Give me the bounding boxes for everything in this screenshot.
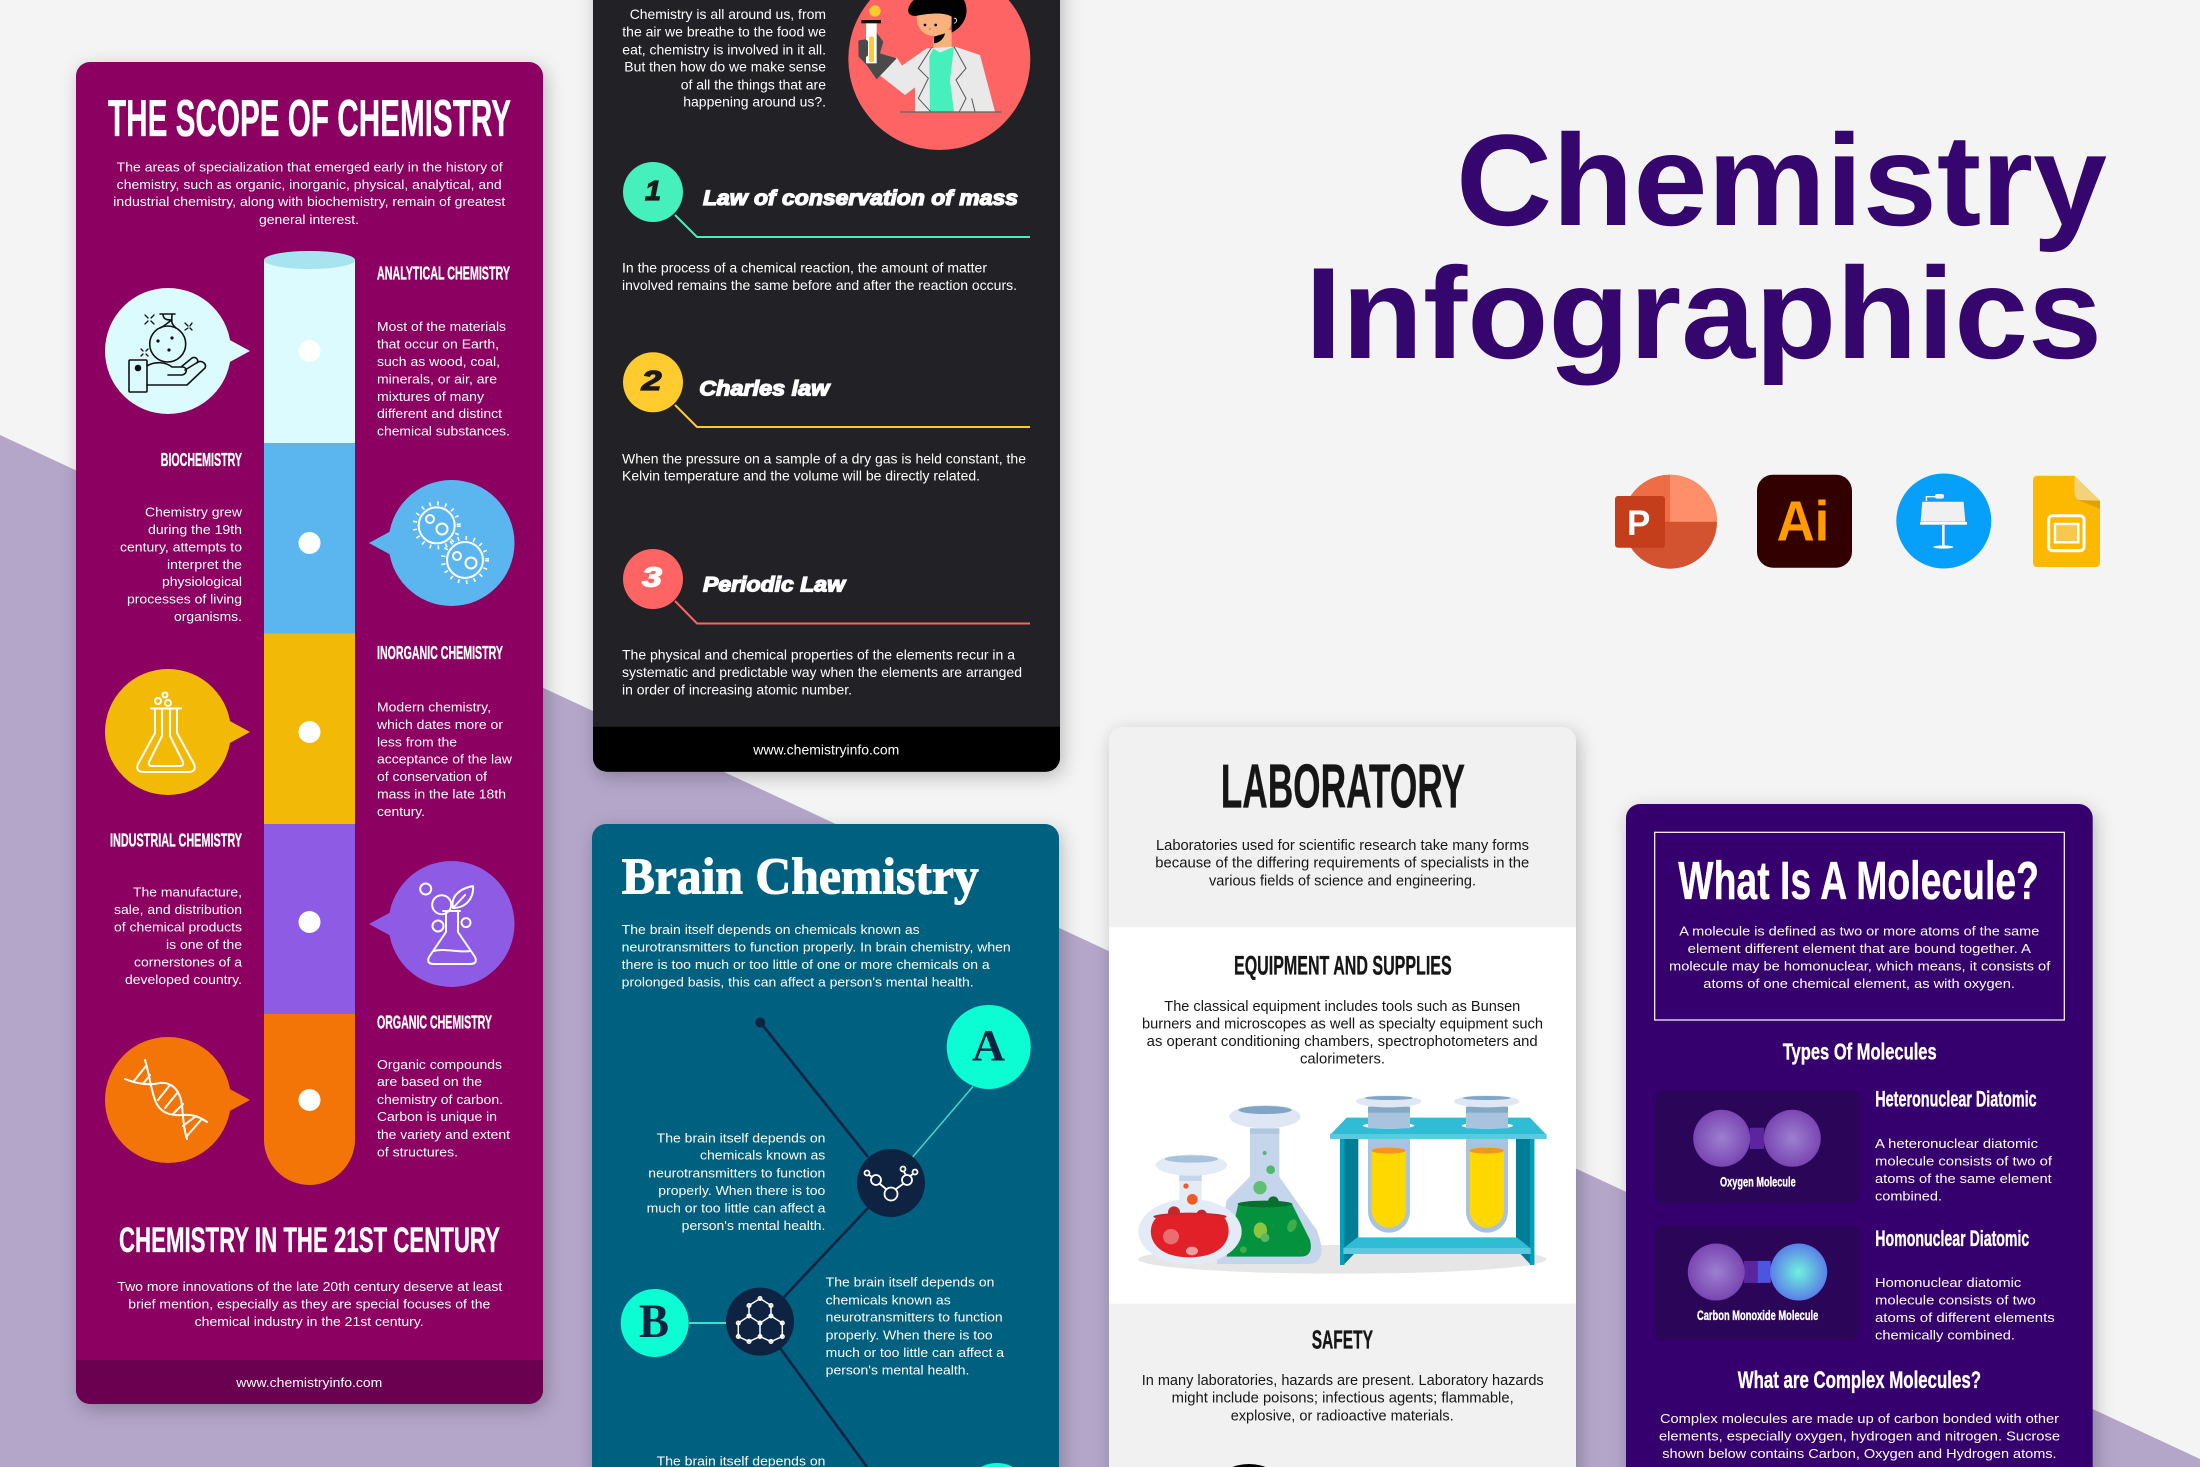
law 2: Charles law <box>622 352 1030 484</box>
intro text <box>622 6 826 110</box>
main title <box>1305 107 2107 386</box>
text: heteronuclear diatomic <box>1875 1086 2052 1203</box>
icon: DNA bubble <box>105 1037 250 1163</box>
intro text: The areas of specialization that emerged early in the history of <box>117 159 503 174</box>
panel: laboratory <box>1109 727 1576 1467</box>
heading: types of molecules: Types Of Molecules <box>1783 1039 1937 1065</box>
text: analytical chemistry <box>377 319 510 439</box>
text block A <box>647 1130 826 1233</box>
law 3: periodic law: in order of increasing atomic number. <box>622 682 852 698</box>
icon: flask in hand bubble <box>105 288 250 414</box>
text: complex molecules <box>1659 1411 2060 1461</box>
text: biochemistry: during the 19th <box>148 522 242 537</box>
text: inorganic chemistry: acceptance of the law <box>377 752 513 767</box>
intro text: because of the differing requirements of specialists in the <box>1155 856 1529 872</box>
card: carbon monoxide molecule: Carbon Monoxide Molecule <box>1697 1307 1818 1323</box>
text: biochemistry: Chemistry grew <box>145 504 243 520</box>
text: inorganic chemistry: which dates more or <box>376 717 504 732</box>
section: safety: explosive, or radioactive materials. <box>1231 1408 1454 1424</box>
text: industrial chemistry: is one of the <box>166 937 242 952</box>
text: inorganic chemistry: Modern chemistry, <box>377 700 491 715</box>
icon: PowerPoint: P <box>1627 504 1650 543</box>
title box: atoms of one chemical element, as with oxygen. <box>1703 976 2015 991</box>
test tube chart <box>264 251 355 1185</box>
icon: plant in flask bubble <box>369 861 514 987</box>
intro text: Laboratories used for scientific research take many forms <box>1156 838 1529 854</box>
intro text: the air we breathe to the food we <box>622 24 826 40</box>
section: safety: In many laboratories, hazards are present. Laboratory hazards <box>1142 1373 1544 1389</box>
section: safety: might include poisons; infectious agents; flammable, <box>1172 1391 1514 1407</box>
heading: what are complex molecules: What are Complex Molecules? <box>1738 1367 1981 1394</box>
text: heteronuclear diatomic: A heteronuclear diatomic <box>1875 1136 2039 1151</box>
section: equipment and supplies: EQUIPMENT AND SUPPLIES <box>1234 951 1452 981</box>
text: heteronuclear diatomic: combined. <box>1875 1188 1942 1203</box>
intro text <box>622 922 1011 990</box>
text: homonuclear diatomic: chemically combined. <box>1875 1328 2015 1343</box>
title box: A molecule is defined as two or more atoms of the same <box>1679 923 2039 938</box>
text: biochemistry: physiological <box>162 574 242 589</box>
text block B: The brain itself depends on <box>826 1274 994 1290</box>
marker A <box>947 1005 1031 1089</box>
intro text: The brain itself depends on chemicals known as <box>622 922 920 937</box>
title box: What Is A Molecule? <box>1678 851 2039 911</box>
intro text: general interest. <box>259 212 359 227</box>
heading: inorganic chemistry: INORGANIC CHEMISTRY <box>377 642 503 663</box>
marker B: B <box>639 1295 669 1348</box>
text: analytical chemistry: chemical substances. <box>377 424 510 439</box>
heading: organic chemistry: ORGANIC CHEMISTRY <box>377 1012 492 1033</box>
icon: molecule node <box>857 1149 925 1217</box>
text: heteronuclear diatomic: Heteronuclear Diatomic <box>1875 1086 2037 1111</box>
panel footer: www.chemistryinfo.com <box>752 741 899 757</box>
icon: Illustrator: Ai <box>1777 490 1829 554</box>
text: inorganic chemistry <box>376 700 513 819</box>
law 2: Charles law: 2 <box>640 365 662 396</box>
text: homonuclear diatomic <box>1875 1226 2055 1343</box>
text: biochemistry: processes of living <box>127 592 242 607</box>
text: homonuclear diatomic: molecule consists of two <box>1875 1293 2036 1308</box>
text: organic chemistry <box>377 1057 510 1159</box>
text: organic chemistry: the variety and extent <box>377 1127 510 1142</box>
text: analytical chemistry: Most of the materials <box>377 319 507 334</box>
title box <box>1655 832 2064 1020</box>
law 1: conservation of mass: Law of conservation of mass <box>703 187 1018 210</box>
law 2: Charles law: Kelvin temperature and the volume will be directly related. <box>622 468 980 484</box>
text: industrial chemistry: developed country. <box>125 972 242 987</box>
section: equipment and supplies: The classical equipment includes tools such as Bunsen <box>1164 999 1520 1015</box>
text: inorganic chemistry: less from the <box>377 734 457 749</box>
intro text: industrial chemistry, along with biochemistry, remain of greatest <box>113 194 506 209</box>
text: heteronuclear diatomic: molecule consists of two of <box>1875 1154 2052 1168</box>
text: complex molecules: elements, especially oxygen, hydrogen and nitrogen. Sucrose <box>1659 1428 2060 1443</box>
text: industrial chemistry: cornerstones of a <box>134 955 243 970</box>
text block A: The brain itself depends on <box>657 1130 825 1145</box>
card: oxygen molecule: Oxygen Molecule <box>1720 1173 1796 1189</box>
title box: molecule may be homonuclear, which means, it consists of <box>1669 959 2051 974</box>
heading: analytical chemistry: ANALYTICAL CHEMISTRY <box>377 262 510 284</box>
intro text: eat, chemistry is involved in it all. <box>622 41 826 57</box>
heading: biochemistry: BIOCHEMISTRY <box>161 449 242 470</box>
icon: Illustrator <box>1757 475 1852 568</box>
icon: Keynote <box>1896 474 1991 568</box>
section: equipment and supplies: as operant conditioning chambers, spectrophotometers and <box>1147 1034 1538 1050</box>
text: 21st century: chemical industry in the 21st century. <box>195 1314 424 1329</box>
law 2: Charles law: When the pressure on a sample of a dry gas is held constant, the <box>622 450 1026 466</box>
law 1: conservation of mass: In the process of a chemical reaction, the amount of matter <box>622 260 987 276</box>
text: inorganic chemistry: of conservation of <box>377 769 487 784</box>
text: biochemistry: century, attempts to <box>120 539 242 554</box>
text: analytical chemistry: minerals, or air, are <box>377 372 497 386</box>
text block B: person's mental health. <box>826 1362 969 1378</box>
text: organic chemistry: chemistry of carbon. <box>377 1092 503 1107</box>
intro text: prolonged basis, this can affect a person's mental health. <box>622 974 974 990</box>
text: 21st century <box>117 1279 503 1329</box>
law 3: periodic law: The physical and chemical properties of the elements recur in a <box>622 646 1015 662</box>
marker C <box>963 1463 1031 1467</box>
text: 21st century: Two more innovations of the late 20th century deserve at least <box>117 1279 503 1294</box>
intro text: Chemistry is all around us, from <box>630 6 826 22</box>
text: industrial chemistry: The manufacture, <box>133 885 242 900</box>
law 3: periodic law <box>622 549 1030 698</box>
heading: industrial chemistry: INDUSTRIAL CHEMISTRY <box>110 830 242 851</box>
text: inorganic chemistry: century. <box>377 804 425 819</box>
icon: hazard symbol top <box>1219 1464 1279 1467</box>
heading: chemistry in the 21st century: CHEMISTRY IN THE 21ST CENTURY <box>119 1221 500 1260</box>
intro text: of all the things that are <box>681 76 826 92</box>
text: analytical chemistry: mixtures of many <box>377 389 485 404</box>
heading: laboratory: LABORATORY <box>1221 753 1465 822</box>
intro text: various fields of science and engineering. <box>1209 873 1476 889</box>
text block A: properly. When there is too <box>658 1183 825 1198</box>
text: industrial chemistry: of chemical products <box>114 920 243 935</box>
timeline connectors <box>689 1018 973 1467</box>
marker A: A <box>972 1021 1005 1070</box>
illustration: scientist <box>848 0 1030 150</box>
heading: brain chemistry: Brain Chemistry <box>622 848 979 906</box>
intro text: happening around us?. <box>683 94 826 110</box>
illustration: lab glassware <box>1138 1095 1547 1274</box>
intro text: chemistry, such as organic, inorganic, physical, analytical, and <box>117 177 502 192</box>
icon: Google Slides <box>2033 476 2100 567</box>
text block B: chemicals known as <box>826 1292 951 1307</box>
panel footer <box>76 1360 543 1404</box>
text: biochemistry <box>120 504 243 624</box>
panel footer <box>593 727 1060 772</box>
intro text: But then how do we make sense <box>624 59 826 75</box>
law 1: conservation of mass <box>622 162 1030 293</box>
section: equipment and supplies <box>1109 927 1576 1304</box>
section: equipment and supplies: burners and microscopes as well as specialty equipment such <box>1142 1016 1543 1032</box>
text block B: properly. When there is too <box>826 1327 993 1342</box>
text: homonuclear diatomic: Homonuclear diatomic <box>1875 1275 2022 1290</box>
icon: hexagon network node <box>726 1288 794 1356</box>
card: carbon monoxide molecule <box>1656 1226 1859 1340</box>
intro text: neurotransmitters to function properly. In brain chemistry, when <box>622 939 1011 954</box>
text block A: chemicals known as <box>700 1148 826 1163</box>
text block A: neurotransmitters to function <box>648 1165 825 1180</box>
law 3: periodic law: Periodic Law <box>703 574 847 597</box>
intro text: there is too much or too little of one or more chemicals on a <box>622 957 991 972</box>
section: safety: SAFETY <box>1312 1324 1373 1354</box>
main title: Chemistry <box>1456 107 2107 253</box>
panel: the scope of chemistry <box>76 62 543 1404</box>
text: industrial chemistry <box>114 885 243 987</box>
text: analytical chemistry: such as wood, coal, <box>377 354 500 369</box>
text block B: much or too little can affect a <box>826 1345 1005 1360</box>
icon: conical flask bubble <box>105 669 250 795</box>
text block A: person's mental health. <box>682 1218 825 1233</box>
text: homonuclear diatomic: atoms of different elements <box>1875 1310 2055 1325</box>
panel: laws of chemistry <box>593 0 1060 772</box>
main title: Infographics <box>1305 240 2102 386</box>
text: organic chemistry: of structures. <box>377 1144 458 1159</box>
marker B <box>621 1289 689 1357</box>
text: organic chemistry: Carbon is unique in <box>377 1109 497 1124</box>
text: analytical chemistry: that occur on Earth, <box>377 337 499 352</box>
panel footer: www.chemistryinfo.com <box>235 1375 382 1390</box>
text block B: neurotransmitters to function <box>826 1310 1003 1325</box>
card: oxygen molecule <box>1656 1090 1859 1203</box>
law 1: conservation of mass: involved remains the same before and after the reaction occurs. <box>622 277 1017 293</box>
panel: brain chemistry <box>592 824 1059 1467</box>
title box: element different element that are bound together. A <box>1688 941 2031 956</box>
icon: microbes bubble <box>369 480 514 606</box>
text: homonuclear diatomic: Homonuclear Diatomic <box>1875 1226 2029 1251</box>
text: heteronuclear diatomic: atoms of the same element <box>1875 1171 2052 1186</box>
text: complex molecules: Complex molecules are made up of carbon bonded with other <box>1660 1411 2060 1426</box>
law 1: conservation of mass: 1 <box>645 175 661 206</box>
law 3: periodic law: 3 <box>642 562 663 593</box>
section: safety <box>1142 1324 1544 1424</box>
heading: the scope of chemistry: THE SCOPE OF CHEMISTRY <box>108 90 511 148</box>
intro text <box>113 159 506 227</box>
icon: PowerPoint <box>1615 475 1717 569</box>
text: biochemistry: interpret the <box>167 557 242 572</box>
text: industrial chemistry: sale, and distribution <box>114 902 242 917</box>
intro text <box>1155 838 1529 889</box>
panel: what is a molecule <box>1626 804 2093 1467</box>
text: organic chemistry: are based on the <box>377 1074 482 1089</box>
text: inorganic chemistry: mass in the late 18th <box>377 787 506 802</box>
text block A: much or too little can affect a <box>647 1201 826 1216</box>
law 3: periodic law: systematic and predictable way when the elements are arranged <box>622 664 1022 680</box>
law 2: Charles law: Charles law <box>699 378 831 401</box>
section: equipment and supplies: calorimeters. <box>1300 1051 1385 1067</box>
text: analytical chemistry: different and distinct <box>377 406 502 421</box>
text: organic chemistry: Organic compounds <box>377 1057 503 1072</box>
text block B <box>826 1274 1005 1378</box>
text: complex molecules: shown below contains Carbon, Oxygen and Hydrogen atoms. <box>1662 1446 2057 1461</box>
text: 21st century: brief mention, especially as they are special focuses of the <box>128 1296 490 1312</box>
text: biochemistry: organisms. <box>174 609 242 624</box>
